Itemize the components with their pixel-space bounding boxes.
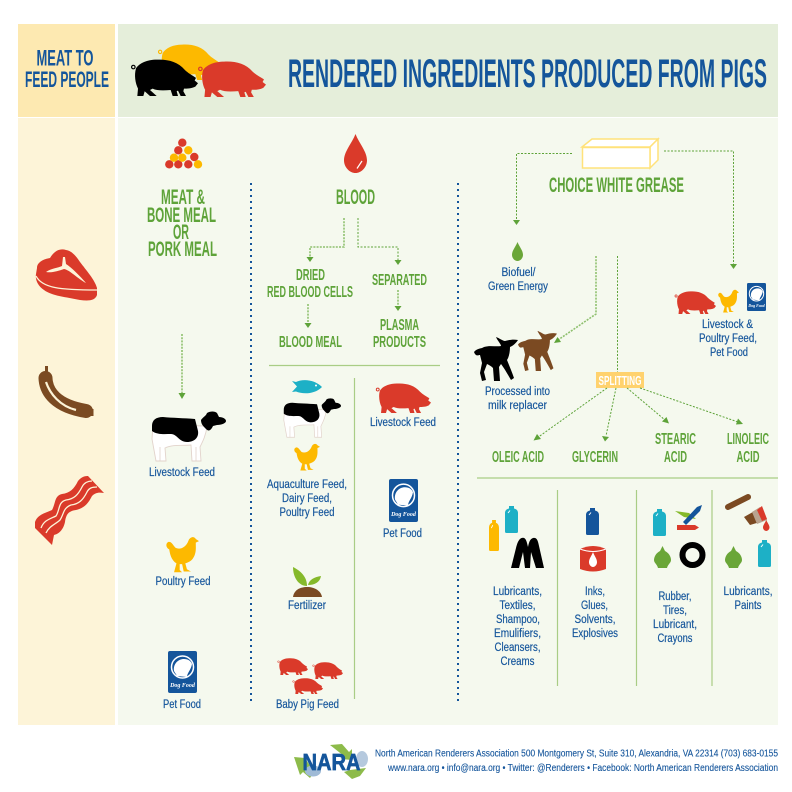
heading: choice white grease: CHOICE WHITE GREASE [549, 174, 684, 197]
label: livestock poultry pet: Poultry Feed, [699, 333, 757, 345]
arrow: meal to feed [178, 334, 186, 399]
icon: pig livestock [376, 383, 431, 413]
arrow: separated to plasma [394, 290, 402, 311]
label: inks list: Inks, [585, 586, 605, 598]
icon: cow small [284, 398, 341, 437]
label: paints list [724, 586, 772, 612]
heading: separated: SEPARATED [372, 272, 427, 289]
label: livestock poultry pet: Livestock & [702, 319, 753, 331]
logo: NARA: NARA [302, 749, 360, 775]
label: lubricants list [493, 586, 542, 668]
label: aquaculture dairy poultry: Aquaculture Feed, [267, 479, 347, 491]
icon: blood drop [344, 134, 367, 173]
label: aquaculture dairy poultry [267, 479, 347, 519]
label: pet food blood: Pet Food [383, 528, 422, 540]
dotted column divider left [250, 183, 252, 703]
label: stearic acid: STEARIC [655, 431, 696, 448]
icon: fertilizer [293, 567, 322, 597]
label: poultry feed: Poultry Feed [156, 576, 210, 588]
icon: bacon [35, 476, 104, 545]
label: livestock poultry pet: Pet Food [710, 347, 748, 359]
heading: meat and bone meal or pork meal [147, 186, 217, 261]
label: baby pig feed: Baby Pig Feed [276, 699, 339, 711]
heading: dried red blood cells: RED BLOOD CELLS [267, 284, 353, 301]
icon: chicken small [294, 444, 320, 470]
icons: pig chicken dog food [675, 283, 766, 314]
label: lubricants list: Lubricants, [493, 586, 542, 598]
icon: cow [152, 412, 226, 461]
label: glycerin: GLYCERIN [572, 449, 618, 466]
label: aquaculture dairy poultry: Dairy Feed, [282, 493, 332, 505]
label: lubricants list: Cleansers, [494, 642, 540, 654]
label: stearic acid: ACID [664, 449, 687, 466]
icon: steak [36, 249, 97, 300]
label: paints list: Paints [734, 600, 762, 612]
heading: meat and bone meal or pork meal: MEAT & [161, 186, 205, 209]
heading: plasma products: PRODUCTS [373, 334, 426, 351]
heading: meat and bone meal or pork meal: OR [173, 221, 189, 244]
heading: meat to feed people: MEAT TO [36, 46, 94, 70]
icons: rubber column [653, 505, 702, 568]
icon: biofuel drop [512, 242, 523, 261]
label: pet food: Pet Food [163, 699, 201, 711]
heading: meat to feed people [25, 46, 109, 92]
arrow: blood to dried [306, 218, 344, 262]
icon: dog food [168, 651, 197, 693]
arrow: grease to feed [664, 151, 737, 269]
label: lubricants list: Textiles, [500, 600, 536, 612]
label: rubber list: Lubricant, [653, 619, 697, 631]
icon: dog food blood [389, 479, 418, 522]
arrow: dried to blood meal [304, 304, 312, 328]
heading: meat to feed people: FEED PEOPLE [25, 67, 109, 92]
arrow: grease to biofuel [513, 154, 572, 225]
label: rubber list: Crayons [658, 633, 693, 645]
label: fertilizer: Fertilizer [288, 600, 326, 612]
icon: sausage [46, 366, 92, 416]
label: rubber list: Rubber, [658, 591, 692, 603]
label: livestock feed blood: Livestock Feed [370, 417, 436, 429]
label: inks list: Glues, [581, 600, 608, 612]
label: lubricants list: Shampoo, [496, 614, 540, 626]
panel: main content body [118, 118, 778, 725]
label: lubricants list: Emulifiers, [494, 628, 541, 640]
label: milk replacer [485, 386, 550, 412]
heading: meat and bone meal or pork meal: BONE MEAL [147, 204, 216, 227]
heading: plasma products [373, 317, 426, 351]
panel: meat to feed people header [18, 24, 115, 117]
label: inks list [572, 586, 618, 640]
icon: chicken [166, 537, 199, 572]
icon: block of grease [582, 139, 658, 168]
arrow: grease to splitting [616, 256, 618, 372]
label: oleic acid: OLEIC ACID [492, 449, 544, 466]
label: inks list: Solvents, [574, 614, 616, 626]
panel: main title header [118, 24, 778, 117]
icons: inks column [580, 508, 606, 572]
icon: calves [474, 331, 557, 381]
label: livestock feed: Livestock Feed [149, 467, 215, 479]
icon: baby pigs [278, 658, 343, 694]
label: aquaculture dairy poultry: Poultry Feed [280, 507, 334, 519]
heading: dried red blood cells: DRIED [296, 267, 325, 284]
label: paints list: Lubricants, [724, 586, 772, 598]
label: rubber list: Tires, [663, 605, 687, 617]
badge: splitting [596, 372, 644, 388]
label: biofuel: Biofuel/ [502, 267, 536, 279]
label: inks list: Explosives [572, 628, 618, 640]
label: rubber list [653, 591, 697, 645]
badge: splitting: SPLITTING [598, 373, 642, 388]
logo: NARA [294, 744, 368, 779]
arrows: splitting to acids [534, 388, 743, 442]
icon: meal pile [165, 138, 202, 168]
label: livestock poultry pet [699, 319, 757, 359]
arrow: grease to milk replacer [554, 256, 596, 343]
icon: fish [292, 380, 322, 393]
label: linoleic acid: ACID [736, 449, 760, 466]
heading: meat and bone meal or pork meal: PORK MEAL [148, 238, 217, 261]
dotted column divider right [457, 183, 459, 703]
label: lubricants list: Creams [500, 656, 535, 668]
label: linoleic acid [727, 431, 769, 466]
label: biofuel [488, 267, 548, 293]
heading: dried red blood cells [267, 267, 353, 301]
heading: plasma products: PLASMA [380, 317, 419, 334]
icons: paints column [725, 497, 771, 568]
label: biofuel: Green Energy [488, 281, 548, 293]
icons: lubricant column [489, 506, 544, 568]
icon: three pigs [132, 45, 266, 97]
heading: blood: BLOOD [336, 186, 375, 209]
panel: meat to feed people body [18, 118, 115, 725]
heading: blood meal: BLOOD MEAL [279, 334, 342, 351]
label: stearic acid [655, 431, 696, 466]
label: milk replacer: Processed into [485, 386, 550, 398]
arrow: blood to separated [358, 218, 402, 265]
label: milk replacer: milk replacer [488, 400, 547, 412]
